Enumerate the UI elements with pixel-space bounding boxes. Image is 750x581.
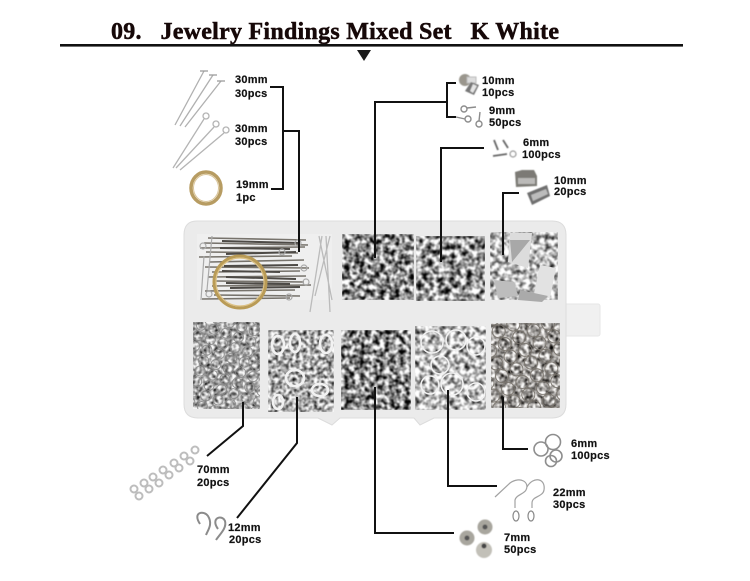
panel: organizer box — [184, 221, 600, 425]
box tab — [560, 304, 600, 336]
compartment: ribbon ends — [490, 232, 558, 302]
label: 22mm hooks: 30pcs — [553, 499, 585, 511]
label: 30mm head pins: 30mm — [235, 74, 268, 86]
label: 6mm jump rings — [571, 438, 610, 462]
label: 9mm eye screws — [489, 105, 521, 129]
label: 9mm eye screws: 9mm — [489, 105, 515, 117]
compartment: chain — [193, 322, 260, 409]
icon: lobster clasps — [197, 513, 225, 540]
icon: earring hooks — [495, 480, 544, 521]
label: 7mm bead caps: 50pcs — [504, 544, 536, 556]
label: 12mm clasps: 12mm — [228, 522, 261, 534]
compartment: lobster clasps — [268, 330, 334, 412]
label: 30mm head pins — [235, 74, 268, 100]
label: 19mm wire — [236, 179, 269, 204]
label: 6mm crimps — [522, 137, 561, 161]
label: 10mm end caps: 10mm — [482, 75, 515, 87]
label: 12mm clasps: 20pcs — [229, 534, 261, 546]
label: 10mm ribbon ends: 20pcs — [554, 186, 586, 198]
label: 22mm hooks — [553, 487, 586, 511]
box body — [184, 221, 566, 425]
label: 10mm end caps — [482, 75, 515, 99]
label: 6mm jump rings: 6mm — [571, 438, 597, 450]
label: 6mm jump rings: 100pcs — [571, 450, 610, 462]
label: 7mm bead caps — [504, 532, 536, 556]
icon: eye pins — [173, 113, 229, 170]
compartment: jump rings — [491, 323, 560, 408]
icon: pointer triangle — [357, 50, 371, 61]
label: 19mm wire: 19mm — [236, 179, 269, 191]
label: 10mm ribbon ends: 10mm — [554, 175, 587, 187]
compartment: pins and wire — [197, 234, 332, 312]
label: 70mm chain: 70mm — [197, 464, 230, 476]
label: 30mm head pins: 30pcs — [235, 88, 267, 100]
label: 30mm eye pins: 30mm — [235, 123, 268, 135]
label: 10mm end caps: 10pcs — [482, 87, 514, 99]
icon: eye screws — [456, 106, 482, 127]
label: 12mm clasps — [228, 522, 261, 546]
compartment: earring hooks — [415, 326, 486, 410]
icon: bead caps — [460, 520, 492, 558]
label: 6mm crimps: 6mm — [523, 137, 549, 149]
label: 70mm chain: 20pcs — [197, 477, 229, 489]
icon: head pins — [175, 71, 225, 127]
label: 22mm hooks: 22mm — [553, 487, 586, 499]
compartment: bead caps — [341, 330, 411, 410]
label: 7mm bead caps: 7mm — [504, 532, 530, 544]
title rule — [60, 44, 683, 47]
label: 30mm eye pins: 30pcs — [235, 136, 267, 148]
leader lines — [207, 83, 528, 533]
gold wire ring — [214, 256, 266, 308]
icon: ribbon ends — [515, 170, 550, 205]
label: 10mm ribbon ends — [554, 175, 587, 198]
label: 6mm crimps: 100pcs — [522, 149, 561, 161]
icon: gold wire — [191, 172, 221, 204]
label: 30mm eye pins — [235, 123, 268, 148]
icon: extender chain — [130, 446, 198, 500]
title: 09. Jewelry Findings Mixed Set K White — [111, 19, 559, 45]
icon: crimps — [493, 140, 516, 157]
icon: jump rings — [534, 434, 562, 466]
label: 19mm wire: 1pc — [236, 192, 256, 204]
compartment: end caps and eye screws — [342, 234, 414, 300]
icon: end caps — [459, 74, 479, 95]
label: 70mm chain — [197, 464, 230, 489]
label: 9mm eye screws: 50pcs — [489, 117, 521, 129]
compartment: fold-over crimps — [416, 236, 485, 301]
